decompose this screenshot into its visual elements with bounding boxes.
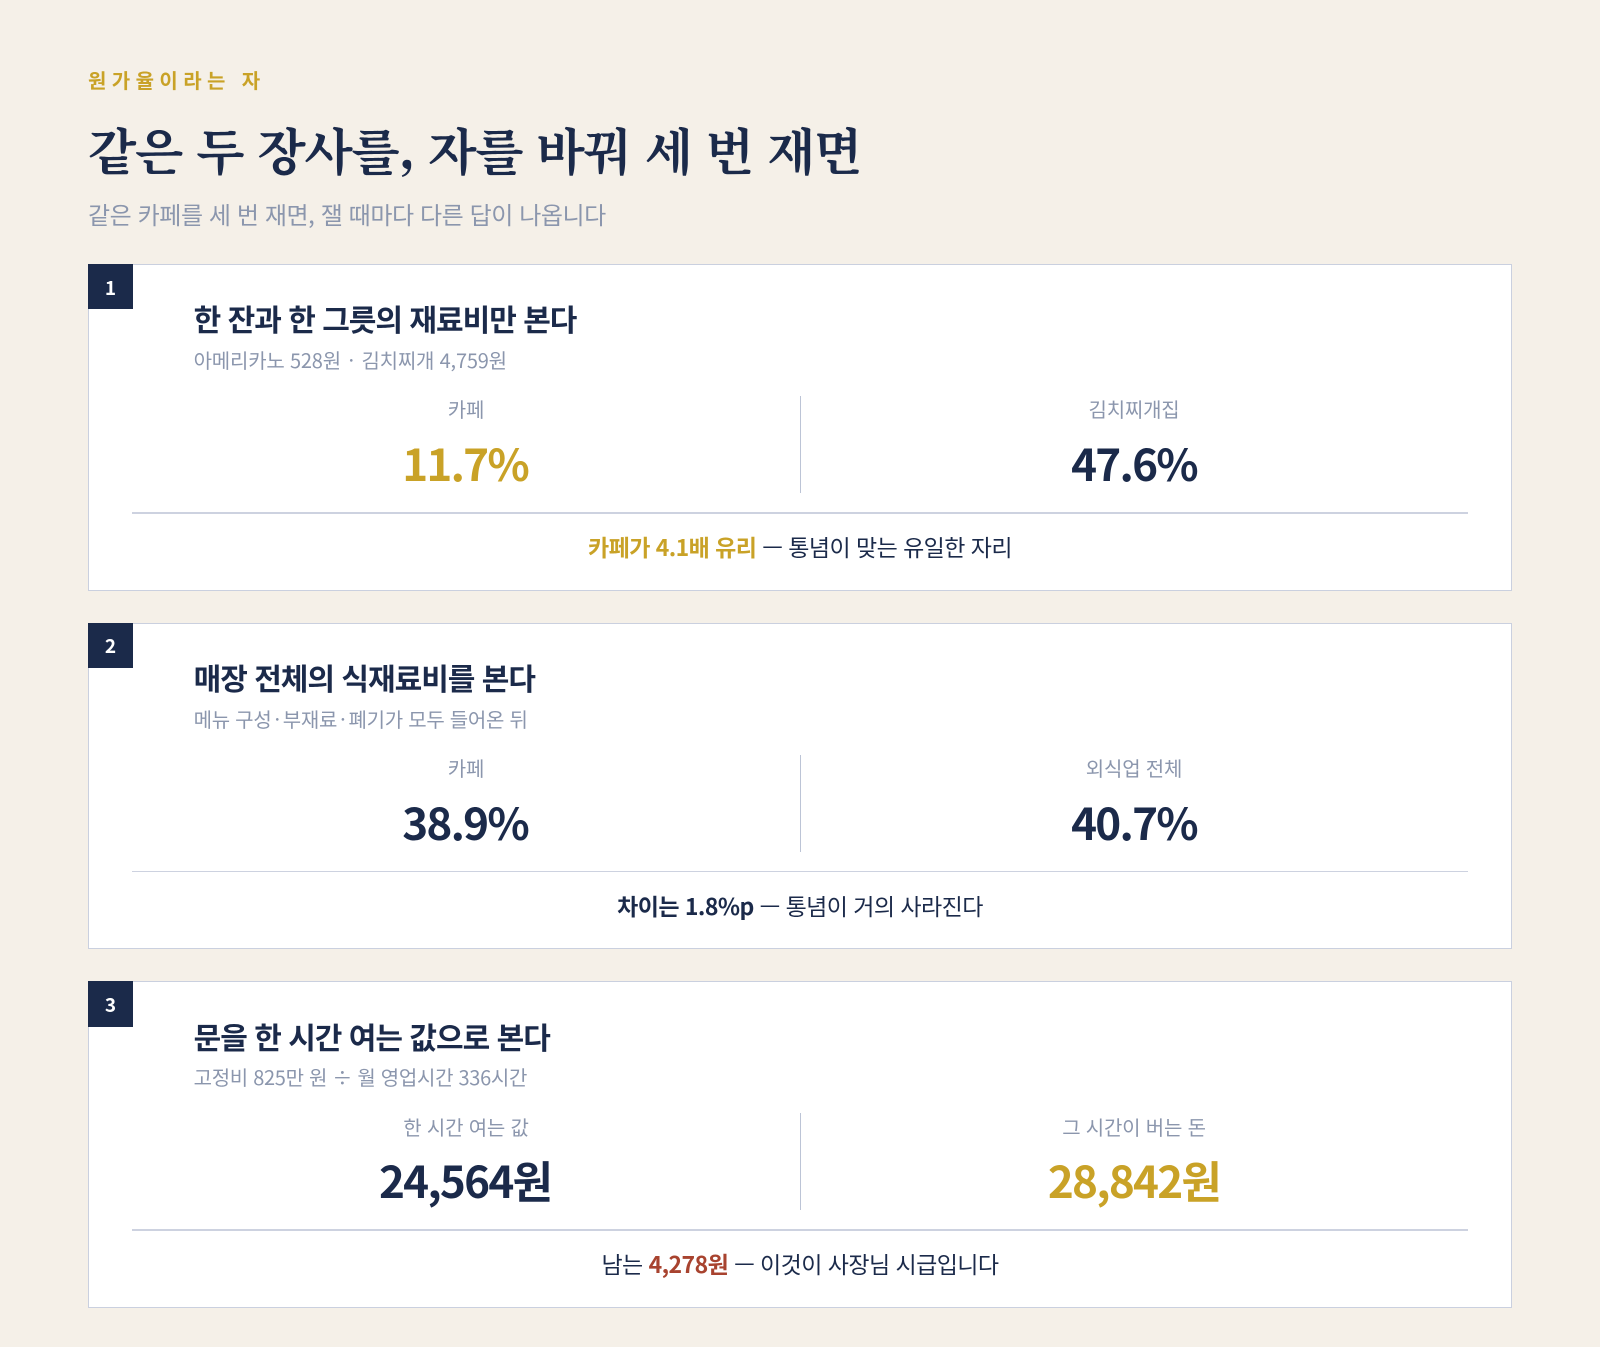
metric: cost of opening one hour: 24,564원 — [379, 1147, 551, 1211]
metric: money earned per hour — [1048, 1112, 1220, 1211]
title: 같은 두 장사를, 자를 바꿔 세 번 재면 — [88, 113, 861, 185]
metric: kimchi stew shop: 김치찌개집 — [1088, 394, 1180, 423]
metric: cafe: 38.9% — [402, 789, 528, 853]
badge 2 — [88, 623, 133, 668]
subtitle: 같은 카페를 세 번 재면, 잴 때마다 다른 답이 나옵니다 — [88, 196, 606, 231]
metric: cafe: 11.7% — [402, 430, 528, 494]
panel: step 1 — [88, 264, 1512, 591]
conclusion 1: 카페가 4.1배 유리 — 통념이 맞는 유일한 자리 — [588, 529, 1012, 563]
metric: all restaurants — [1071, 753, 1198, 853]
panel: step 3 — [88, 981, 1512, 1308]
badge 2: 2 — [105, 632, 116, 659]
metric: cafe: 카페 — [448, 753, 484, 782]
metric: money earned per hour: 그 시간이 버는 돈 — [1062, 1112, 1206, 1141]
metric: kimchi stew shop: 47.6% — [1071, 430, 1197, 494]
subheading 1: 아메리카노 528원 · 김치찌개 4,759원 — [194, 345, 507, 374]
badge 1 — [88, 264, 133, 309]
subheading 2: 메뉴 구성·부재료·폐기가 모두 들어온 뒤 — [194, 704, 528, 733]
panel: step 2 — [88, 623, 1512, 949]
metric: kimchi stew shop — [1071, 394, 1198, 494]
eyebrow: 원가율이라는 자 — [88, 65, 266, 94]
badge 3 — [88, 981, 133, 1027]
conclusion 3: 남는 4,278원 — 이것이 사장님 시급입니다 — [601, 1246, 999, 1280]
metric: cafe: 카페 — [448, 394, 484, 423]
metric: cost of opening one hour: 한 시간 여는 값 — [403, 1112, 529, 1141]
metric: cafe — [402, 753, 528, 853]
badge 3: 3 — [105, 991, 116, 1018]
metric: cost of opening one hour — [379, 1112, 551, 1211]
heading 1: 한 잔과 한 그릇의 재료비만 본다 — [194, 296, 576, 340]
subheading 3: 고정비 825만 원 ÷ 월 영업시간 336시간 — [194, 1062, 527, 1091]
conclusion 2: 차이는 1.8%p — 통념이 거의 사라진다 — [617, 888, 983, 922]
heading 3: 문을 한 시간 여는 값으로 본다 — [194, 1014, 550, 1058]
metric: money earned per hour: 28,842원 — [1048, 1147, 1220, 1211]
metric: all restaurants: 외식업 전체 — [1086, 753, 1182, 782]
badge 1: 1 — [105, 274, 116, 301]
metric: cafe — [402, 394, 528, 494]
heading 2: 매장 전체의 식재료비를 본다 — [194, 655, 535, 699]
metric: all restaurants: 40.7% — [1071, 789, 1197, 853]
